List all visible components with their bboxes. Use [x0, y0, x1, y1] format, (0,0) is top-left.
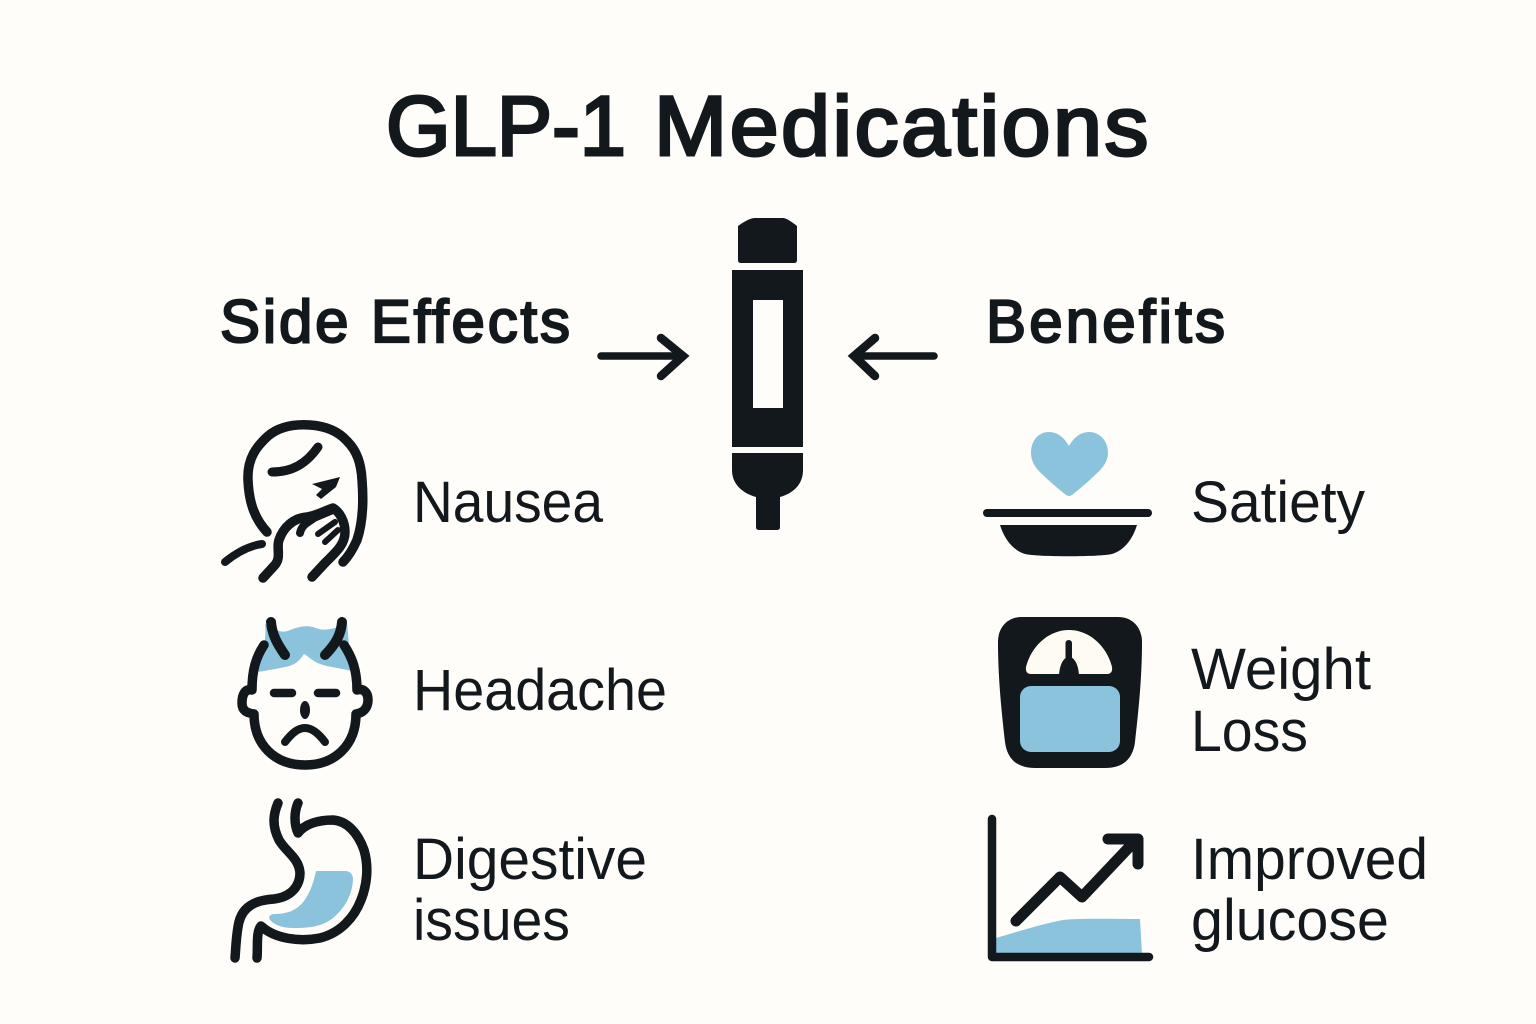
icon: improved glucose chart [992, 819, 1149, 957]
heading: benefits: Benefits [986, 288, 1225, 355]
arrow: side effects to pen [601, 338, 683, 376]
icon: headache [242, 622, 368, 765]
title: Medications [654, 79, 1151, 173]
label: improved glucose: Improved [1191, 827, 1428, 892]
arrow: benefits to pen [854, 338, 934, 376]
icon: weight scale [998, 617, 1142, 768]
icon: satiety [983, 432, 1152, 556]
icon: stomach [235, 803, 367, 958]
title: GLP-1 [386, 79, 626, 173]
label: weight loss: Weight [1191, 637, 1371, 702]
label: satiety: Satiety [1191, 470, 1365, 535]
label: digestive issues [413, 827, 647, 953]
icon: injection pen [732, 218, 803, 530]
title [386, 79, 1151, 173]
label: improved glucose: glucose [1191, 888, 1389, 953]
label: improved glucose [1191, 827, 1428, 953]
label: weight loss: Loss [1191, 699, 1308, 764]
label: weight loss [1191, 637, 1371, 764]
label: digestive issues: issues [413, 888, 570, 953]
label: nausea: Nausea [413, 470, 604, 535]
label: digestive issues: Digestive [413, 827, 647, 892]
label: headache: Headache [413, 658, 667, 723]
heading: side effects: Side Effects [220, 288, 570, 355]
icon: nausea [225, 425, 363, 578]
